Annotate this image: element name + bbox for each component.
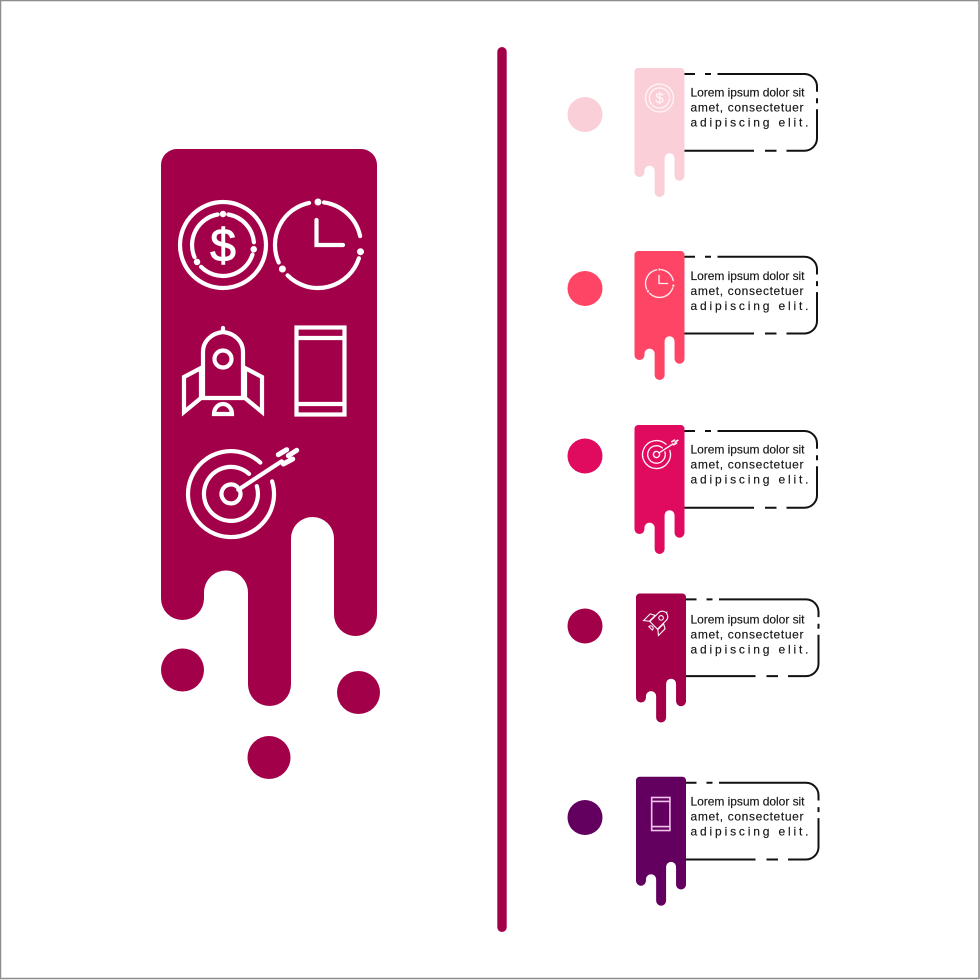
body text: adipiscing elit.: [690, 472, 808, 486]
body text: adipiscing elit.: [690, 825, 808, 839]
body text: amet, consectetuer: [690, 810, 804, 824]
icon: dollar coin: [646, 84, 673, 112]
icon: target with arrow: [188, 450, 297, 537]
body text: [690, 269, 808, 313]
body text: Lorem ipsum dolor sit: [690, 86, 805, 100]
body text: Lorem ipsum dolor sit: [690, 612, 805, 626]
row 3: target: [568, 425, 817, 554]
drip tab: [636, 777, 686, 906]
dashed text box: [684, 74, 817, 151]
body text: adipiscing elit.: [690, 642, 808, 656]
bullet dot: [568, 271, 602, 306]
icon: rocket: [643, 605, 674, 636]
drip tab: [634, 68, 685, 197]
vertical divider: [497, 47, 507, 932]
drip tab: [636, 594, 686, 722]
icon: smartphone: [652, 797, 670, 831]
row 5: smartphone: [568, 777, 818, 906]
body text: [690, 795, 808, 839]
body text: Lorem ipsum dolor sit: [690, 269, 805, 283]
icon: clock: [646, 270, 673, 297]
dashed text box: [684, 431, 817, 508]
bullet dot: [568, 97, 602, 132]
bullet dot: [568, 608, 602, 644]
body text: Lorem ipsum dolor sit: [690, 442, 805, 456]
large drip shape: [161, 149, 377, 706]
dashed text box: [686, 599, 818, 676]
body text: [690, 442, 808, 486]
body text: adipiscing elit.: [690, 299, 808, 313]
body text: amet, consectetuer: [690, 628, 804, 642]
dashed text box: [686, 783, 818, 860]
row 1: dollar: [568, 68, 817, 197]
bullet dot: [568, 800, 602, 835]
icon: clock: [275, 202, 361, 288]
panel: large drip banner with icons: [161, 149, 377, 706]
icon: dollar coin: [180, 202, 266, 288]
body text: [690, 86, 808, 130]
icon: rocket: [184, 328, 262, 414]
dashed text box: [684, 257, 817, 334]
bullet dot: [568, 438, 602, 474]
body text: adipiscing elit.: [690, 116, 808, 130]
row 4: rocket: [568, 594, 818, 722]
body text: [690, 612, 808, 656]
body text: Lorem ipsum dolor sit: [690, 795, 805, 809]
body text: amet, consectetuer: [690, 101, 804, 115]
drip tab: [634, 251, 685, 380]
icon: smartphone: [296, 328, 344, 414]
falling drops: [161, 648, 380, 779]
drip tab: [634, 425, 685, 554]
body text: amet, consectetuer: [690, 458, 804, 472]
body text: amet, consectetuer: [690, 284, 804, 298]
icon: target with arrow: [643, 440, 678, 469]
row 2: clock: [568, 251, 817, 380]
